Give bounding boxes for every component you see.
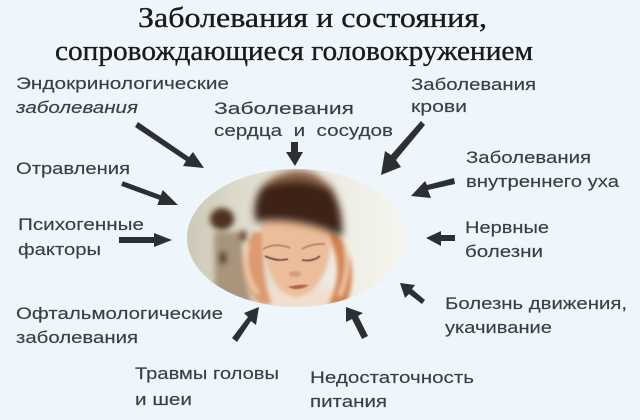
face <box>261 218 331 297</box>
label: motion sickness: Болезнь движения, <box>445 294 627 313</box>
eyes, nose and mouth <box>263 244 325 289</box>
arrow: heart <box>286 142 303 166</box>
arrow: endocrine <box>135 122 204 168</box>
arrow: inner ear <box>411 178 455 198</box>
hair <box>255 171 342 238</box>
label: inner ear diseases: внутреннего уха <box>466 172 620 191</box>
label: heart and vessel diseases: сердца и сосудов <box>214 121 393 140</box>
title: сопровождающиеся головокружением <box>55 36 533 67</box>
label: nutritional deficiency: Недостаточность <box>310 368 474 387</box>
label: head and neck injuries <box>135 364 279 409</box>
label: psychogenic factors: факторы <box>18 240 101 259</box>
label: inner ear diseases <box>466 148 620 191</box>
arrow: motion sickness <box>400 283 425 304</box>
label: blood diseases: крови <box>411 97 467 116</box>
central photo: dizzy woman <box>187 169 405 310</box>
arrow: ophthalmic <box>232 307 259 342</box>
label: nervous diseases: болезни <box>465 242 543 261</box>
label: heart and vessel diseases: Заболевания <box>214 99 354 118</box>
label: motion sickness <box>445 294 627 337</box>
label: blood diseases <box>411 75 536 116</box>
label: inner ear diseases: Заболевания <box>466 148 591 167</box>
label: nutritional deficiency <box>310 368 474 411</box>
label: psychogenic factors <box>18 215 144 259</box>
arrow: psychogenic <box>119 233 172 247</box>
title: Заболевания и состояния, <box>138 3 487 34</box>
neck and chest <box>268 288 338 307</box>
label: endocrine diseases: Эндокринологические <box>16 74 229 93</box>
blurred background figure <box>210 208 252 307</box>
arrow: blood <box>381 121 425 175</box>
label: nutritional deficiency: питания <box>310 392 387 411</box>
label: endocrine diseases <box>15 74 229 117</box>
label: nervous diseases: Нервные <box>465 218 549 237</box>
label: head and neck injuries: Травмы головы <box>135 364 279 383</box>
label: ophthalmic diseases: Офтальмологические <box>16 304 223 323</box>
label: ophthalmic diseases <box>16 304 223 347</box>
arrow: nutrition <box>346 307 368 339</box>
label: motion sickness: укачивание <box>445 318 552 337</box>
label: endocrine diseases: заболевания <box>15 98 138 117</box>
arrow: poisoning <box>121 181 178 205</box>
motion-blurred hands <box>243 230 352 305</box>
label: psychogenic factors: Психогенные <box>18 215 144 234</box>
label: ophthalmic diseases: заболевания <box>16 328 138 347</box>
label: heart and vessel diseases <box>214 99 393 140</box>
label: head and neck injuries: и шеи <box>135 390 192 409</box>
label: blood diseases: Заболевания <box>411 75 536 94</box>
arrow: nervous <box>426 231 455 246</box>
label: nervous diseases <box>465 218 549 261</box>
title <box>55 3 533 67</box>
label: poisoning: Отравления <box>16 159 130 178</box>
